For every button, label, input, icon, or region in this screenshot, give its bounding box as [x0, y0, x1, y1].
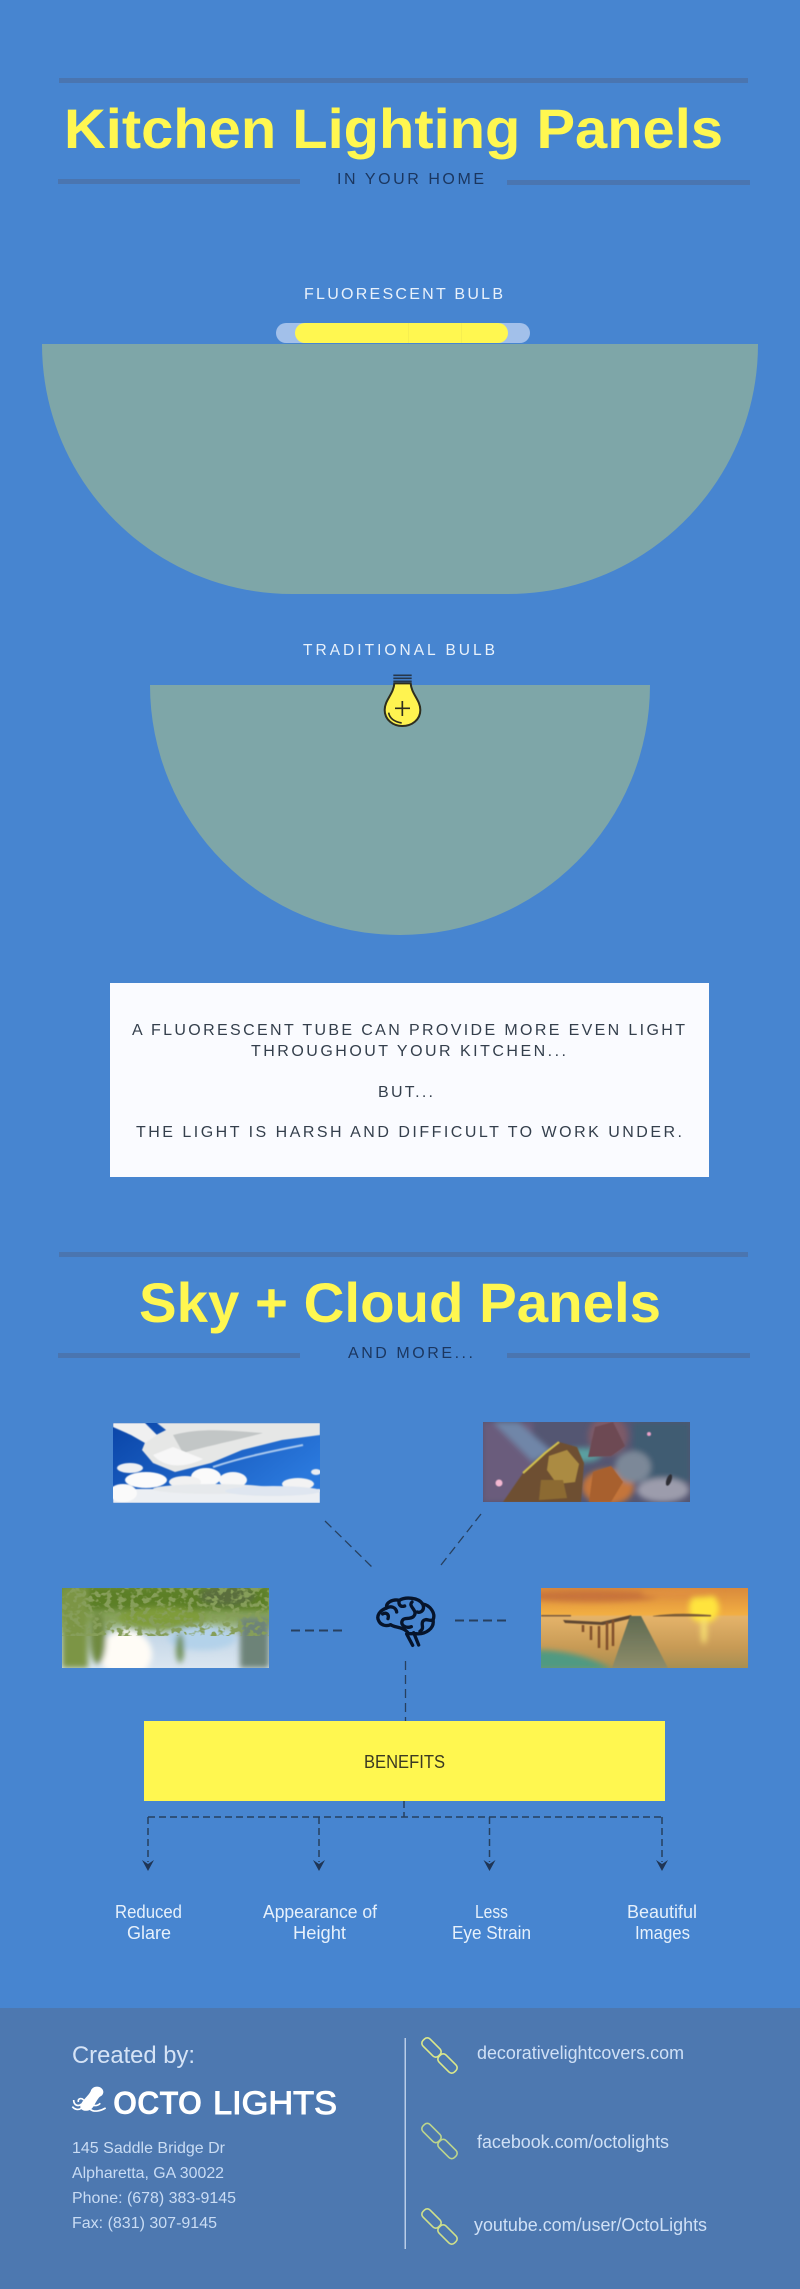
- benefit: reduced glare: Reduced: [115, 1902, 182, 1922]
- benefit: beautiful images: Beautiful: [627, 1902, 697, 1922]
- benefit: reduced glare: Glare: [127, 1923, 171, 1943]
- callout: fluorescent vs traditional text: A FLUORESCENT TUBE CAN PROVIDE MORE EVEN LIGHT: [132, 1022, 685, 1039]
- image: blue sky with clouds: [113, 1423, 320, 1503]
- subtitle: IN YOUR HOME: [337, 171, 484, 188]
- arrows: benefits tree: [142, 1801, 668, 1871]
- address: Fax: (831) 307-9145: [72, 2215, 217, 2232]
- benefit: beautiful images: [627, 1902, 697, 1943]
- box: benefits: [144, 1721, 665, 1801]
- panel: traditional bulb: [150, 642, 650, 935]
- panel: fluorescent bulb: [42, 286, 758, 594]
- callout: fluorescent vs traditional text: THROUGHOUT YOUR KITCHEN...: [251, 1043, 566, 1060]
- benefit: less eye strain: Less: [475, 1902, 508, 1922]
- label: traditional bulb: TRADITIONAL BULB: [303, 642, 495, 659]
- section subtitle: AND MORE...: [348, 1345, 473, 1362]
- icon: brain: [378, 1598, 434, 1645]
- title: Kitchen Lighting Panels: [64, 97, 723, 160]
- link: facebook: [420, 2122, 669, 2160]
- callout: fluorescent vs traditional text: [110, 983, 709, 1177]
- callout: fluorescent vs traditional text: BUT...: [378, 1084, 433, 1101]
- link: website: decorativelightcovers.com: [477, 2043, 684, 2063]
- image: tree leaves against bright sky: [62, 1588, 269, 1668]
- labels: benefits: [115, 1902, 697, 1943]
- link: website: [420, 2036, 684, 2075]
- address: 145 Saddle Bridge Dr: [72, 2140, 226, 2157]
- link: facebook: facebook.com/octolights: [477, 2132, 669, 2152]
- section title: Sky + Cloud Panels: [139, 1271, 661, 1334]
- label: fluorescent bulb: FLUORESCENT BULB: [304, 286, 503, 303]
- benefit: less eye strain: [452, 1902, 531, 1943]
- benefit: appearance of height: Height: [293, 1923, 346, 1943]
- logo: octo lights: LIGHTS: [213, 2085, 337, 2121]
- callout: fluorescent vs traditional text: THE LIGHT IS HARSH AND DIFFICULT TO WORK UNDER.: [136, 1124, 682, 1141]
- logo: octo lights: OCTO: [113, 2085, 202, 2121]
- logo: octo lights: [72, 2085, 337, 2121]
- image: sunset over pier: [541, 1588, 748, 1668]
- benefit: less eye strain: Eye Strain: [452, 1923, 531, 1943]
- connectors: images to brain: [291, 1514, 511, 1721]
- link: youtube: [420, 2207, 707, 2246]
- address: Alpharetta, GA 30022: [72, 2165, 224, 2182]
- header: Sky + Cloud Panels: [58, 1252, 750, 1362]
- light spread shape: traditional: [150, 685, 650, 935]
- benefit: reduced glare: [115, 1902, 182, 1943]
- image: nebula: [483, 1422, 690, 1502]
- created by: Created by:: [72, 2042, 195, 2069]
- icon: light bulb: [385, 675, 420, 726]
- link: youtube: youtube.com/user/OctoLights: [474, 2215, 707, 2235]
- benefit: appearance of height: [263, 1902, 378, 1943]
- box: benefits: BENEFITS: [364, 1752, 445, 1772]
- address: Phone: (678) 383-9145: [72, 2190, 236, 2207]
- header: Kitchen Lighting Panels: [58, 78, 750, 188]
- icon: fluorescent tube: [276, 323, 530, 343]
- benefit: beautiful images: Images: [635, 1923, 690, 1943]
- benefit: appearance of height: Appearance of: [263, 1902, 378, 1922]
- address: [72, 2140, 236, 2232]
- footer panel: [0, 2008, 800, 2289]
- light spread shape: fluorescent: [42, 344, 758, 594]
